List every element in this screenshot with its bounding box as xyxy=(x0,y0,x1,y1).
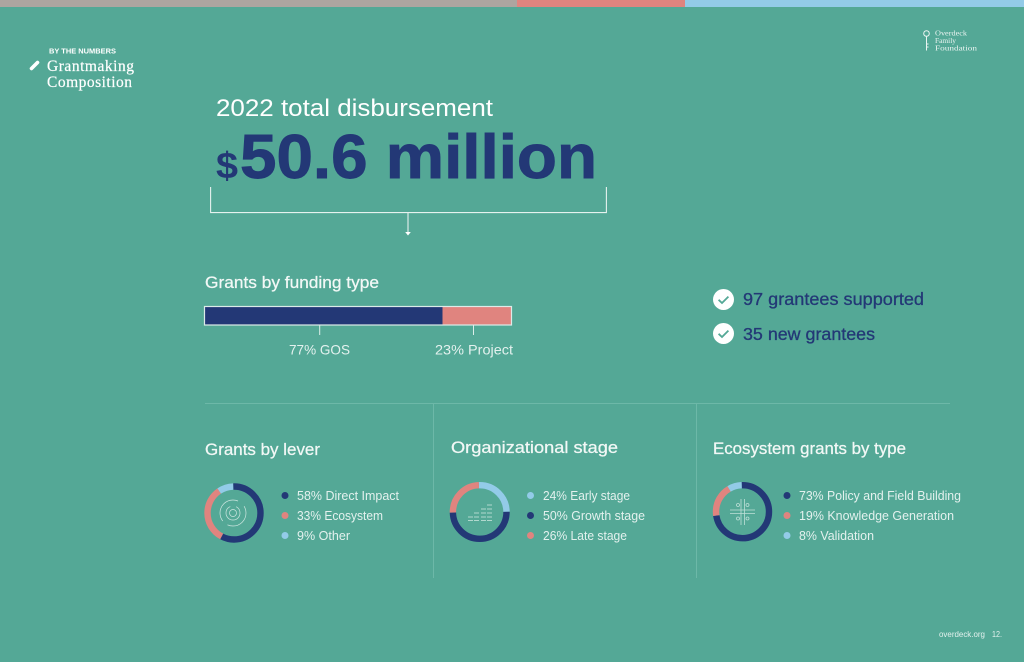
heading: Grants by funding type xyxy=(205,274,379,292)
logo wordmark xyxy=(935,30,978,52)
logo wordmark: Foundation xyxy=(935,44,978,52)
legend: 50% Growth stage xyxy=(543,508,645,523)
section header xyxy=(32,46,134,91)
callout: grantee counts xyxy=(713,289,924,344)
section title xyxy=(47,58,134,91)
callout item: grantees supported: 97 grantees supported xyxy=(743,289,924,309)
headline label: 2022 total disbursement xyxy=(216,95,493,122)
icon: key xyxy=(924,31,929,50)
panel: grants by lever xyxy=(205,441,399,543)
headline amount: 50.6 million xyxy=(240,123,597,192)
panel: ecosystem grants by type xyxy=(713,440,961,543)
headline: total disbursement xyxy=(216,95,597,192)
logo: Overdeck Family Foundation xyxy=(924,30,978,52)
legend xyxy=(784,488,961,543)
icon: concentric rings xyxy=(220,500,246,526)
icon: pencil xyxy=(32,62,38,68)
section title: Grantmaking xyxy=(47,58,134,75)
donut chart xyxy=(453,485,506,539)
footer: 12. xyxy=(992,630,1002,639)
bar label: GOS: 77% GOS xyxy=(289,342,350,358)
donut chart xyxy=(716,485,769,538)
panel: organizational stage xyxy=(451,439,645,543)
legend xyxy=(282,488,399,543)
icon: rising dashes xyxy=(468,505,492,520)
legend: 58% Direct Impact xyxy=(297,488,399,503)
section title: Composition xyxy=(47,74,132,91)
donut chart xyxy=(208,486,260,540)
panel: grants by funding type xyxy=(204,274,513,358)
logo wordmark: Overdeck xyxy=(935,30,968,38)
stacked bar chart xyxy=(204,306,512,335)
callout item: new grantees: 35 new grantees xyxy=(743,324,875,344)
logo wordmark: Family xyxy=(935,37,957,45)
legend: 19% Knowledge Generation xyxy=(799,508,954,523)
top colour strip xyxy=(0,0,1024,7)
legend: 24% Early stage xyxy=(543,488,630,503)
bracket with arrow xyxy=(211,187,606,236)
bar label: Project: 23% Project xyxy=(435,342,513,358)
legend xyxy=(527,488,645,543)
legend: 33% Ecosystem xyxy=(297,508,383,523)
heading: Ecosystem grants by type xyxy=(713,440,906,458)
legend: 26% Late stage xyxy=(543,528,627,543)
heading: Organizational stage xyxy=(451,439,618,457)
legend: 73% Policy and Field Building xyxy=(799,488,961,503)
eyebrow label: BY THE NUMBERS xyxy=(49,46,116,56)
icon: crossing lines xyxy=(730,499,755,525)
headline amount: $ xyxy=(216,145,238,186)
legend: 8% Validation xyxy=(799,528,874,543)
footer: overdeck.org xyxy=(939,630,985,639)
legend: 9% Other xyxy=(297,528,351,543)
heading: Grants by lever xyxy=(205,441,321,459)
